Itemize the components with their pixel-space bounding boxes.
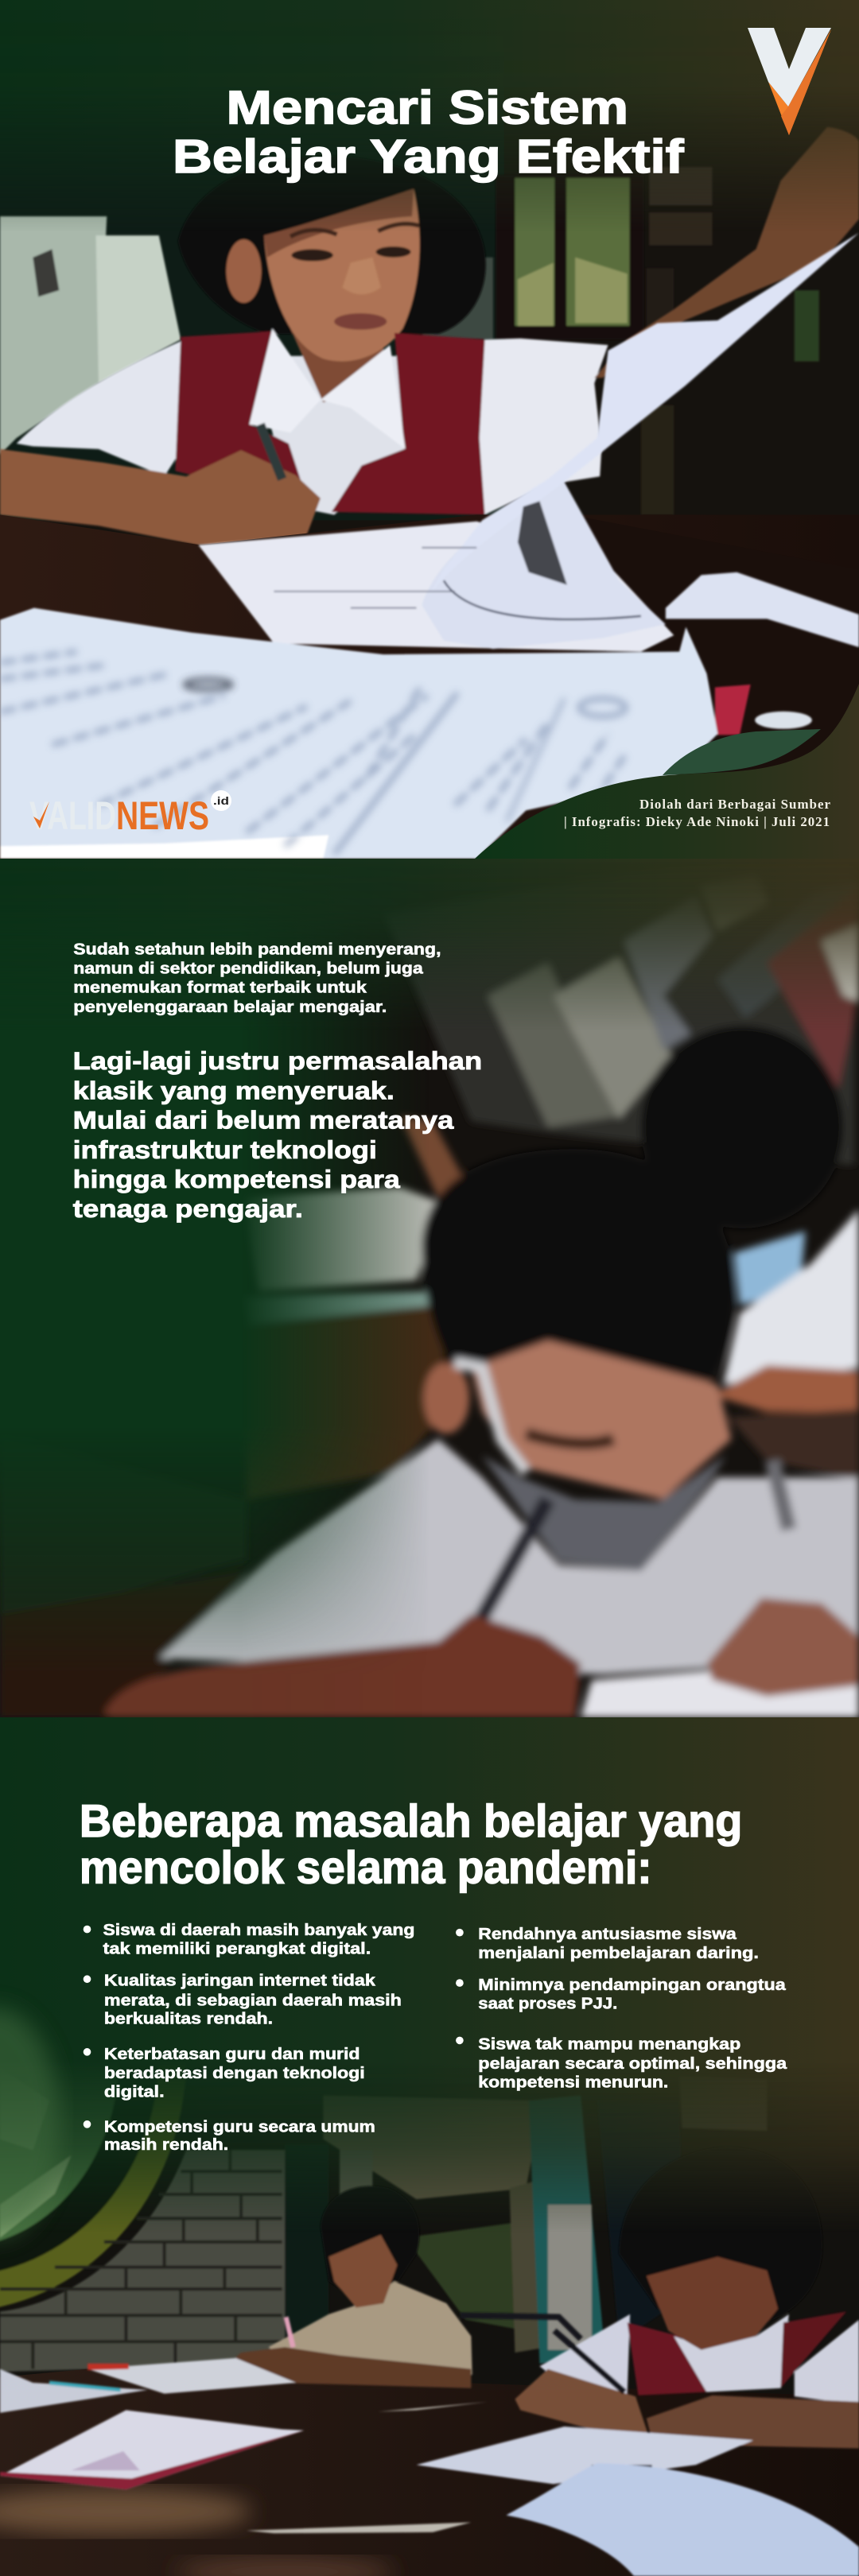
list: right column: Siswa tak mampu menangkap <box>478 2035 740 2053</box>
text block: intro large: Mulai dari belum meratanya <box>73 1106 454 1135</box>
list: left column: Siswa di daerah masih banyak yang <box>103 1921 414 1939</box>
credit text <box>564 797 831 829</box>
foliage through window <box>0 2008 60 2237</box>
logo: ValidNews.id <box>29 790 231 838</box>
text block: intro small: namun di sektor pendidikan, belum juga <box>73 960 423 978</box>
list: left column: digital. <box>104 2082 165 2101</box>
list: left column <box>84 1921 414 2154</box>
text block: intro large: tenaga pengajar. <box>73 1194 303 1223</box>
top gradient overlay <box>305 859 859 1019</box>
corner shape: mid green wave <box>663 729 821 775</box>
list: right column: pelajaran secara optimal, sehingga <box>478 2054 787 2073</box>
logo: ValidNews.id: VALID <box>29 793 116 838</box>
credit text: | Infografis: Dieky Ade Ninoki | Juli 2021 <box>564 814 830 829</box>
text block: intro large: Lagi-lagi justru permasalahan <box>73 1046 482 1075</box>
icon: V logo <box>748 28 831 135</box>
title <box>173 81 684 183</box>
list: right column <box>456 1925 787 2092</box>
list: right column: Minimnya pendampingan orangtua <box>478 1976 786 1994</box>
logo: ValidNews.id: .id <box>213 794 229 807</box>
heading <box>80 1796 742 1894</box>
cover photo: girl turning exam sheet <box>0 126 859 859</box>
title: Belajar Yang Efektif <box>173 130 684 183</box>
top gradient overlay <box>0 1717 859 2576</box>
credit text: Diolah dari Berbagai Sumber <box>639 797 831 812</box>
list: left column: masih rendah. <box>104 2136 228 2154</box>
classroom photo: students writing <box>0 1717 859 2576</box>
list: left column: berkualitas rendah. <box>104 2010 273 2028</box>
list: right column: kompetensi menurun. <box>478 2074 668 2092</box>
list: left column: beradaptasi dengan teknologi <box>104 2064 365 2082</box>
list: right column: Rendahnya antusiasme siswa <box>478 1925 737 1943</box>
panel: cover <box>0 0 859 859</box>
list: left column: merata, di sebagian daerah masih <box>104 1991 402 2009</box>
text block: intro small <box>73 941 441 1016</box>
title: Mencari Sistem <box>226 81 628 134</box>
list: right column: menjalani pembelajaran daring. <box>478 1944 759 1962</box>
text block: intro large <box>73 1046 482 1223</box>
panel: problems <box>0 1717 859 2576</box>
list: left column: Kualitas jaringan internet tidak <box>104 1972 375 1990</box>
corner shape: credit wave <box>475 684 859 859</box>
text block: intro small: Sudah setahun lebih pandemi menyerang, <box>73 941 441 959</box>
text block: intro large: hingga kompetensi para <box>73 1165 400 1193</box>
heading: mencolok selama pandemi: <box>80 1843 652 1894</box>
intro photo: masked students <box>0 836 859 1717</box>
text block: intro small: menemukan format terbaik untuk <box>73 979 367 997</box>
text block: intro small: penyelenggaraan belajar mengajar. <box>73 998 387 1016</box>
panel: introduction <box>0 836 859 1717</box>
list: left column: Keterbatasan guru dan murid <box>104 2045 360 2063</box>
top gradient overlay <box>0 0 859 223</box>
list: left column: Kompetensi guru secara umum <box>104 2117 375 2136</box>
text block: intro large: klasik yang menyeruak. <box>73 1076 395 1104</box>
left green overlay <box>0 920 422 1667</box>
logo: ValidNews.id: NEWS <box>116 793 209 838</box>
text block: intro large: infrastruktur teknologi <box>73 1135 377 1164</box>
list: left column: tak memiliki perangkat digital. <box>103 1940 371 1958</box>
list: right column: saat proses PJJ. <box>478 1994 617 2012</box>
heading: Beberapa masalah belajar yang <box>80 1796 742 1847</box>
